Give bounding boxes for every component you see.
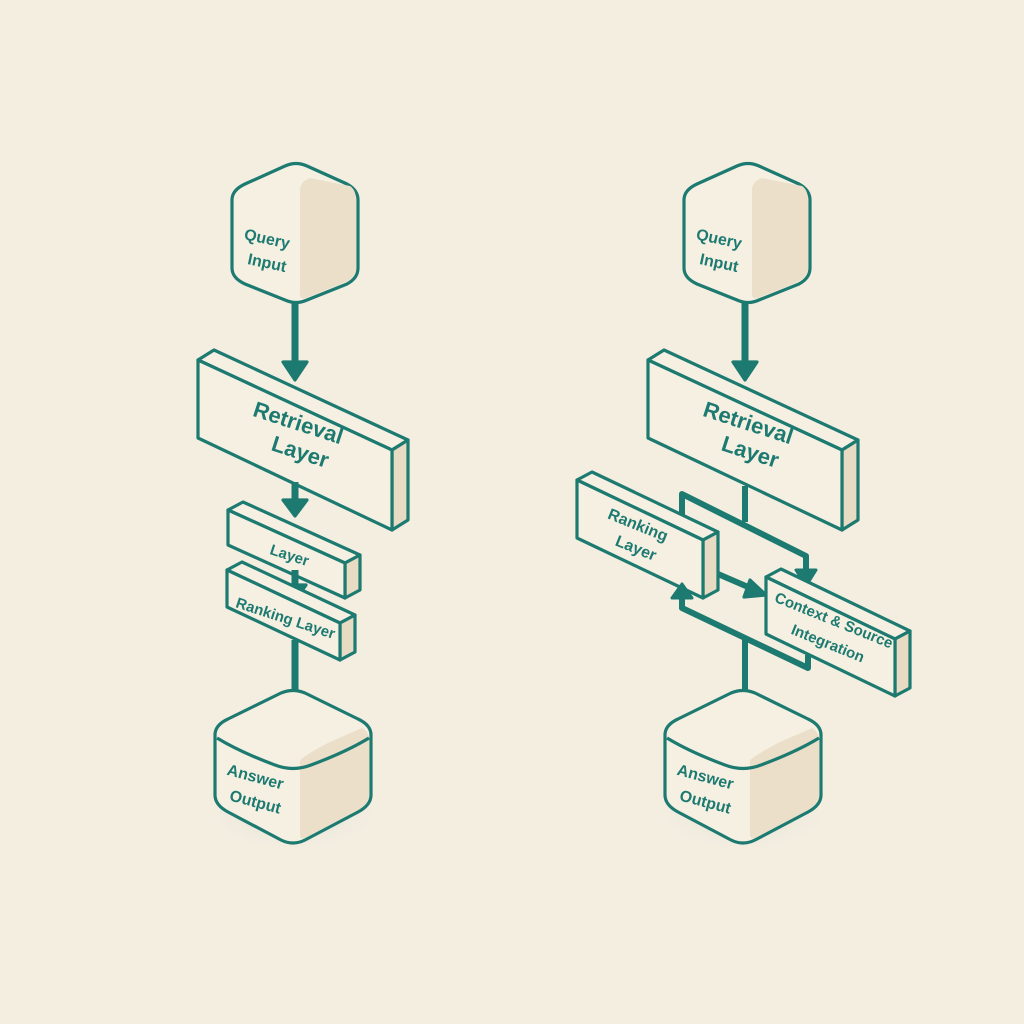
icon: query input cube: Input: [246, 251, 288, 276]
arrow: query to retrieval: [733, 302, 757, 380]
icon: query input cube: Query: [695, 226, 743, 253]
retrieval layer slab: Layer: [719, 431, 783, 473]
context and source integration slab: [766, 569, 910, 696]
icon: answer output box: Answer: [675, 762, 735, 793]
arrow: ranking to context: [718, 574, 766, 597]
icon: answer output box: Output: [228, 788, 283, 818]
layer slab: [228, 502, 360, 598]
left pipeline: [198, 164, 408, 855]
icon: query input cube: [232, 164, 358, 302]
retrieval layer slab: [198, 350, 408, 530]
icon: answer output box: Answer: [225, 762, 285, 793]
arrow: retrieval to layer: [283, 482, 307, 516]
arrow: ranking to answer: [282, 640, 308, 722]
icon: answer output box: [648, 690, 838, 855]
icon: answer output box: Output: [678, 788, 733, 818]
arrows: lower loop back to ranking and down to answer: [672, 584, 808, 722]
context and source integration slab: Context & Source: [772, 589, 895, 652]
retrieval layer slab: Retrieval: [700, 397, 796, 449]
context and source integration slab: Integration: [789, 621, 867, 666]
ranking layer slab: Ranking Layer: [234, 595, 337, 643]
ranking layer slab: [227, 562, 355, 660]
retrieval layer slab: Layer: [269, 431, 333, 473]
layer slab: Layer: [268, 541, 311, 570]
icon: answer output box: [198, 690, 388, 855]
ranking layer slab: Ranking: [605, 506, 670, 546]
retrieval layer slab: [648, 350, 858, 530]
arrows: upper loop into context: [682, 486, 816, 586]
retrieval layer slab: Retrieval: [250, 397, 346, 449]
icon: query input cube: [684, 164, 810, 302]
right pipeline: [577, 164, 910, 855]
icon: query input cube: Query: [243, 226, 291, 253]
ranking layer slab: Layer: [613, 533, 659, 565]
arrow: layer to ranking: [284, 570, 306, 600]
ranking layer slab: [577, 472, 718, 598]
arrow: query to retrieval: [283, 302, 307, 380]
icon: query input cube: Input: [698, 251, 740, 276]
